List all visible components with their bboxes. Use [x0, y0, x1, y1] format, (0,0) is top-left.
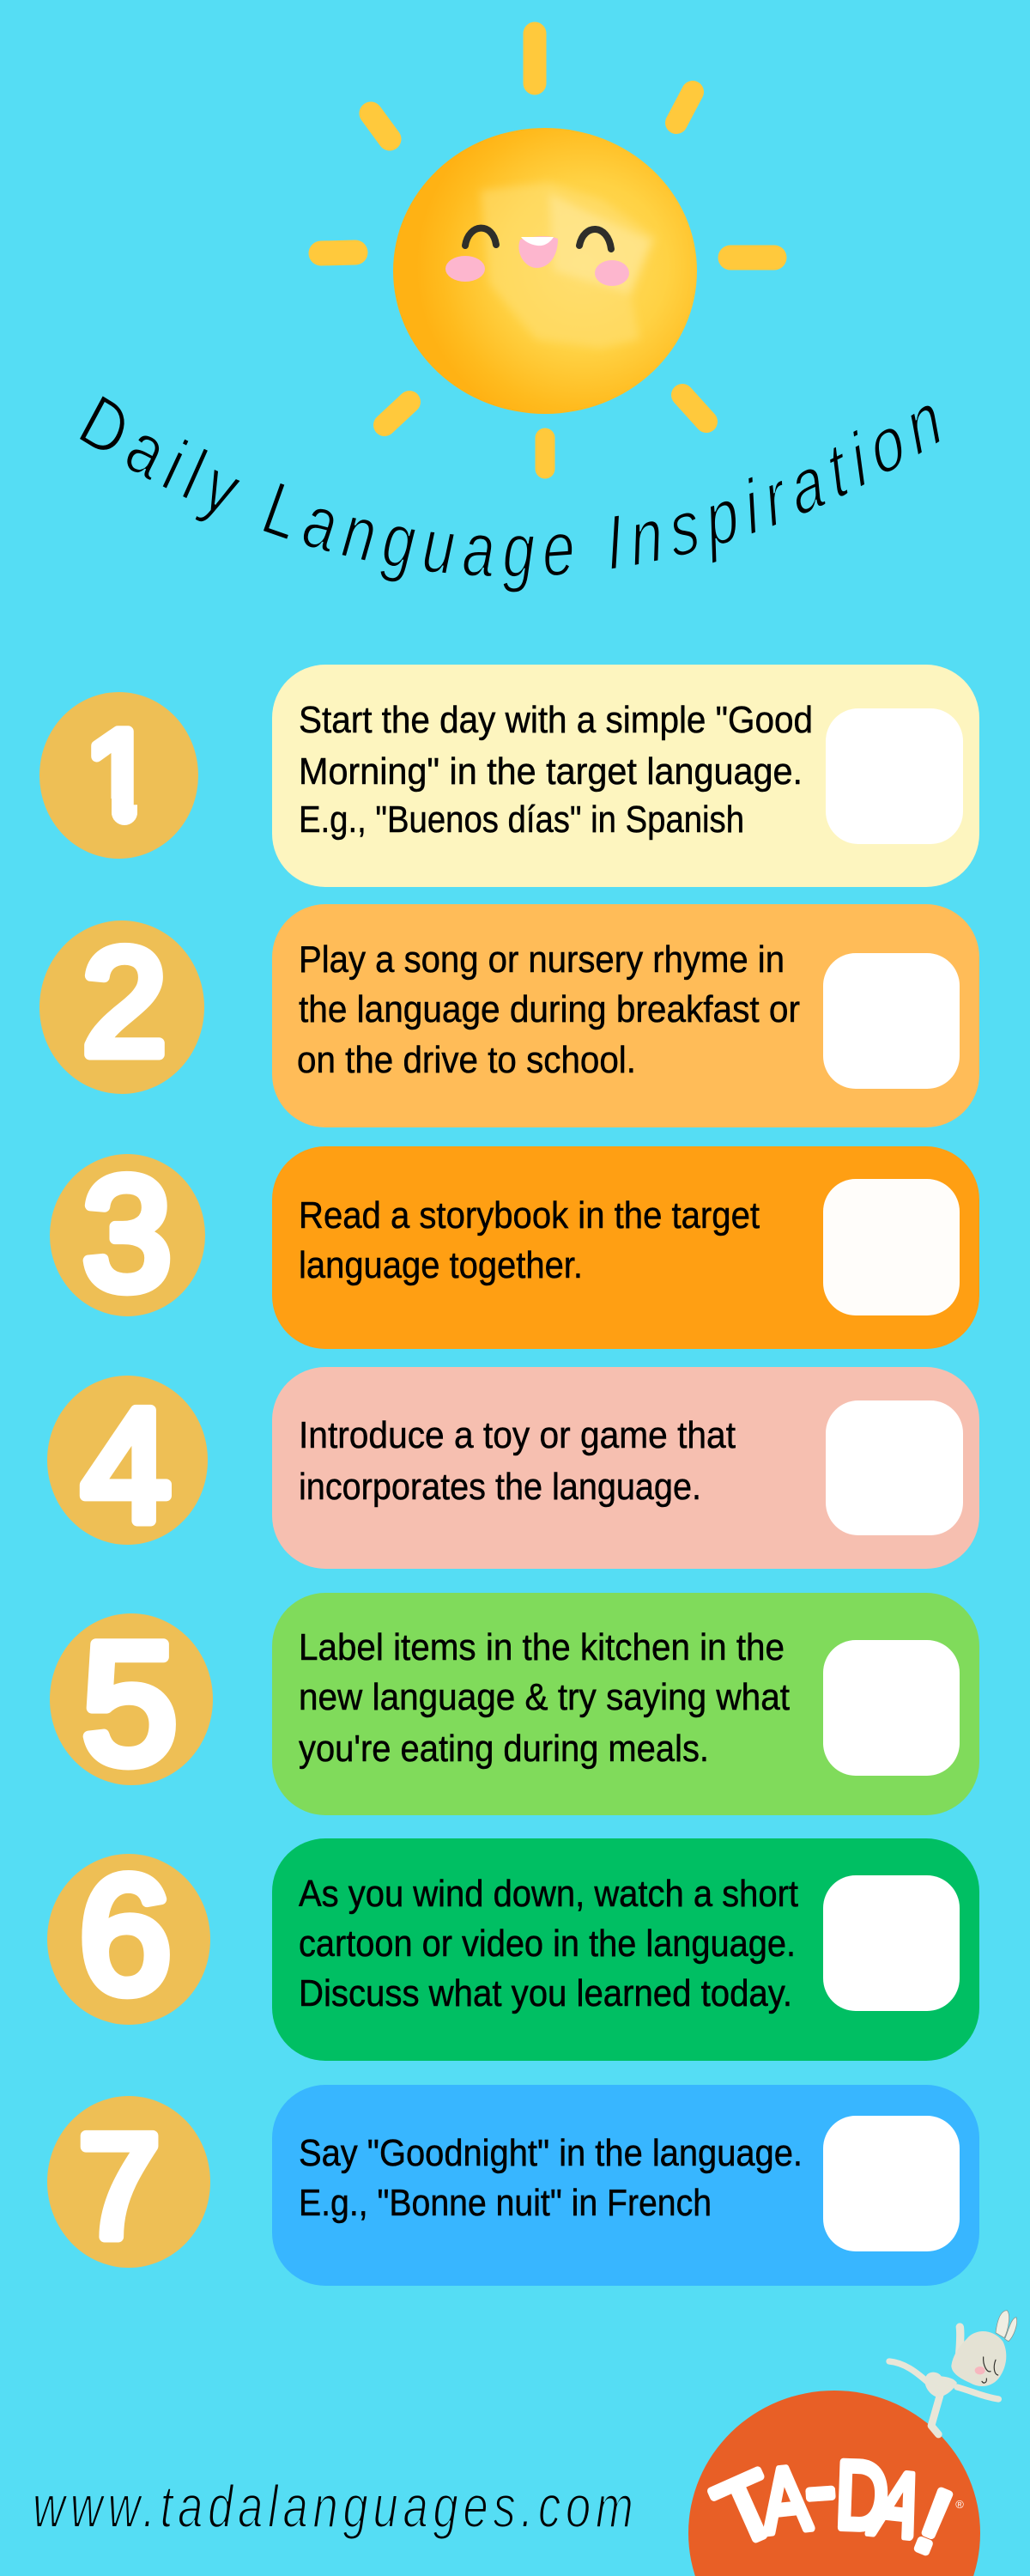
card 2 text: on the drive to school. [297, 1039, 636, 1081]
number badge 7 [47, 2096, 210, 2269]
sun mouth [518, 236, 558, 268]
logo wordmark: D [834, 2441, 890, 2549]
panel: step 1 [39, 665, 979, 887]
card 5 background [272, 1593, 979, 1815]
logo wordmark: T [701, 2452, 793, 2567]
card 7 text [299, 2132, 803, 2224]
card 2 background [272, 904, 979, 1127]
number badge 1 [39, 692, 198, 859]
number badge 6 [47, 1842, 210, 2028]
card 4 text [299, 1414, 736, 1508]
card 5 checkbox [823, 1640, 960, 1776]
sun left cheek [445, 256, 485, 282]
card 5 text: you're eating during meals. [299, 1728, 709, 1770]
panel: step 7 [47, 2085, 979, 2286]
logo wordmark [701, 2436, 964, 2573]
panel: step 2 [39, 904, 979, 1127]
card 6 text: cartoon or video in the language. [299, 1923, 796, 1965]
card 1 checkbox [826, 708, 963, 844]
sun rays [321, 33, 774, 469]
panel: step 5 [50, 1593, 979, 1815]
card 5 text: new language & try saying what [299, 1676, 790, 1718]
sun teeth [521, 237, 554, 246]
card 4 checkbox [826, 1400, 963, 1535]
card 2 text [297, 939, 800, 1081]
bunny cheeks [975, 2366, 985, 2374]
number badge 3 [50, 1144, 205, 1323]
bunny ears [996, 2311, 1017, 2342]
number badge 5 [50, 1607, 213, 1800]
number badge 4: 4 [82, 1376, 171, 1555]
logo wordmark: ! [903, 2470, 964, 2573]
bunny head [951, 2331, 1006, 2386]
panel: step 4 [47, 1367, 979, 1569]
card 6 text: As you wind down, watch a short [299, 1873, 798, 1915]
number badge 5: 5 [82, 1607, 178, 1800]
bunny face [982, 2357, 998, 2383]
sun left eye [465, 228, 496, 246]
logo wordmark: A [862, 2453, 936, 2556]
card 5 text: Label items in the kitchen in the [299, 1626, 785, 1668]
number badge 2 [39, 917, 204, 1094]
card 1 text [299, 699, 813, 841]
bunny body [924, 2372, 957, 2397]
logo circle [688, 2391, 980, 2576]
sun highlights [481, 182, 657, 348]
card 6 text: Discuss what you learned today. [299, 1972, 792, 2014]
card 6 text [299, 1873, 798, 2014]
card 7 text: Say "Goodnight" in the language. [299, 2132, 803, 2174]
card 3 checkbox [823, 1179, 960, 1315]
card 2 text: the language during breakfast or [299, 988, 800, 1030]
card 7 checkbox [823, 2116, 960, 2251]
card 3 text: Read a storybook in the target [299, 1194, 760, 1236]
bunny limbs [889, 2327, 998, 2434]
logo: TA-DA badge [688, 2391, 980, 2576]
logo wordmark: ® [955, 2498, 964, 2511]
number badge 4 [47, 1376, 208, 1555]
card 3 text [299, 1194, 760, 1286]
number badge 2: 2 [82, 917, 167, 1087]
sun right cheek [595, 260, 629, 286]
number badge 6: 6 [79, 1842, 172, 2028]
card 4 text: Introduce a toy or game that [299, 1414, 736, 1456]
card 3 text: language together. [299, 1244, 583, 1286]
number badge 7: 7 [78, 2105, 161, 2269]
card 7 background [272, 2085, 979, 2286]
sun body [393, 128, 697, 414]
card 1 text: Start the day with a simple "Good [299, 699, 813, 741]
card 1 text: Morning" in the target language. [299, 750, 803, 793]
card 6 checkbox [823, 1875, 960, 2011]
number badge 1: 1 [84, 703, 156, 848]
icon: bunny mascot [889, 2311, 1017, 2434]
card 2 text: Play a song or nursery rhyme in [299, 939, 785, 981]
logo wordmark: A [757, 2447, 815, 2552]
card 5 text [299, 1626, 790, 1770]
icon: smiling sun [321, 33, 774, 469]
card 1 background [272, 665, 979, 887]
card 3 background [272, 1146, 979, 1349]
panel: step 3 [50, 1144, 979, 1349]
card 4 text: incorporates the language. [299, 1466, 701, 1508]
logo wordmark: - [802, 2436, 839, 2538]
card 2 checkbox [823, 953, 960, 1089]
card 7 text: E.g., "Bonne nuit" in French [299, 2182, 712, 2224]
card 4 background [272, 1367, 979, 1569]
sun right eye [579, 229, 611, 249]
card 6 background [272, 1838, 979, 2061]
card 1 text: E.g., "Buenos días" in Spanish [299, 799, 744, 841]
number badge 3: 3 [82, 1144, 172, 1323]
title: Daily Language Inspiration [80, 396, 939, 592]
panel: step 6 [47, 1838, 979, 2061]
website url: www.tadalanguages.com [33, 2474, 633, 2541]
